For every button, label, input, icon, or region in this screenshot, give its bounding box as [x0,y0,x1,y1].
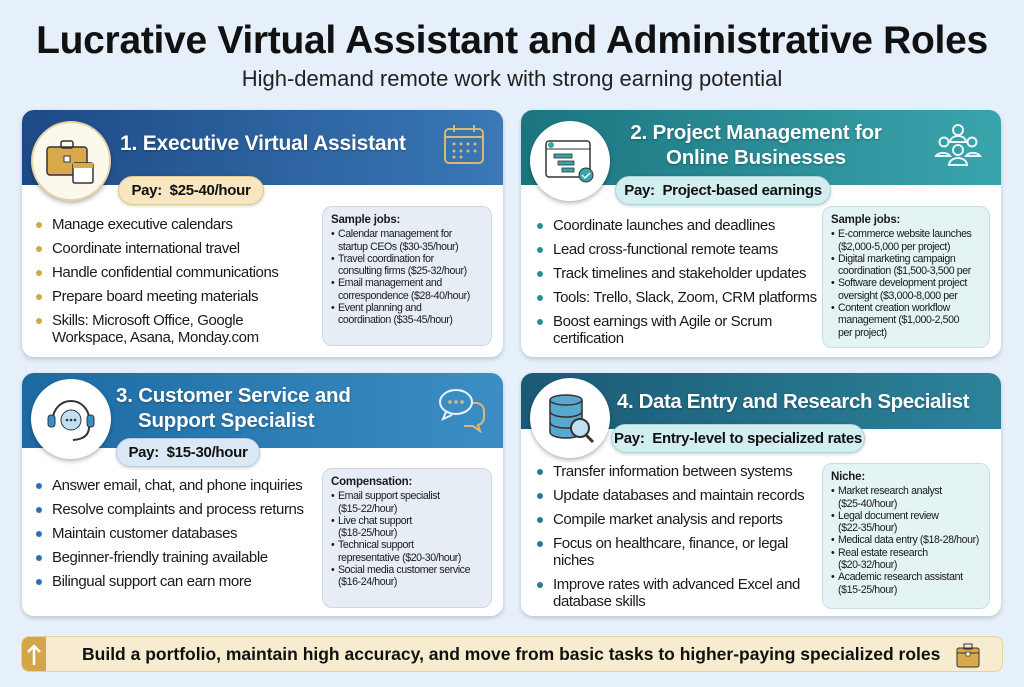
bullet list: Transfer information between systems [553,463,792,480]
compensation box [322,468,492,608]
footer text: Build a portfolio, maintain high accuracy, and move from basic tasks to higher-paying specialized roles [82,644,940,664]
bullet list: Skills: Microsoft Office, Google Workspace, Asana, Monday.com [52,312,259,346]
bullet list: Manage executive calendars [52,216,233,233]
bullet list: Handle confidential communications [52,264,279,281]
bullet list: Boost earnings with Agile or Scrum certification [553,313,772,347]
bullet list: Beginner-friendly training available [52,549,268,566]
compensation box: Technical support [338,539,414,551]
niche box: Market research analyst [838,485,942,497]
icon: up arrow [22,637,46,673]
icon: project board [530,121,610,201]
panel: data entry [521,373,1001,616]
bullet list [537,217,817,347]
bullet list: Maintain customer databases [52,525,237,542]
bullet list: Bilingual support can earn more [52,573,251,590]
sample jobs box: Event planning and [338,302,422,314]
bullet list: Update databases and maintain records [553,487,804,504]
compensation box: Email support specialist [338,490,440,502]
sample jobs box: Email management and [338,277,442,289]
pay pill: Pay: Project-based earnings [624,182,822,199]
bullet list [537,463,804,610]
sample jobs box: coordination ($35-45/hour) [338,314,452,326]
heading: 4. Data Entry and Research Specialist [617,390,969,413]
sample jobs box: Sample jobs: [331,214,400,226]
bullet list: Prepare board meeting materials [52,288,258,305]
pay pill: Pay: $15-30/hour [128,444,248,461]
niche box: Legal document review [838,510,939,522]
panel: executive virtual assistant [22,110,503,357]
heading: Online Businesses [666,146,846,169]
heading: 1. Executive Virtual Assistant [120,132,406,155]
sample jobs box: startup CEOs ($30-35/hour) [338,241,458,253]
icon: calendar [444,125,484,164]
subtitle: High-demand remote work with strong earning potential [242,66,782,91]
niche box: ($15-25/hour) [838,584,897,596]
heading [630,121,882,169]
sample jobs box: E-commerce website launches [838,228,971,240]
compensation box: Social media customer service [338,564,470,576]
niche box: ($25-40/hour) [838,498,897,510]
bullet list: Coordinate launches and deadlines [553,217,775,234]
bullet list: Tools: Trello, Slack, Zoom, CRM platforms [553,289,817,306]
niche box: ($20-32/hour) [838,559,897,571]
bullet list: Answer email, chat, and phone inquiries [52,477,302,494]
icon: chat bubbles [439,389,485,433]
sample jobs box: Digital marketing campaign [838,253,955,265]
icon: briefcase [31,121,111,201]
sample jobs box: Travel coordination for [338,253,434,265]
heading: Support Specialist [138,409,314,432]
sample jobs box [322,206,492,346]
panel: customer service [22,373,503,616]
bullet list: Focus on healthcare, finance, or legal niches [553,535,788,569]
bullet list: Track timelines and stakeholder updates [553,265,806,282]
compensation box: ($18-25/hour) [338,527,397,539]
bullet list [36,216,279,346]
niche box: Real estate research [838,547,928,559]
sample jobs box: Calendar management for [338,228,452,240]
pay pill [615,176,831,205]
sample jobs box: Software development project [838,277,967,289]
niche box [822,463,990,609]
panel: project management [521,110,1001,357]
bullet list: Resolve complaints and process returns [52,501,304,518]
sample jobs box: oversight ($3,000-8,000 per [838,290,957,302]
pay pill: Pay: Entry-level to specialized rates [614,430,862,447]
title: Lucrative Virtual Assistant and Administrative Roles [36,19,988,62]
compensation box: Live chat support [338,515,412,527]
sample jobs box [822,206,990,348]
compensation box: ($15-22/hour) [338,503,397,515]
bullet list: Coordinate international travel [52,240,240,257]
icon: headset [31,379,111,459]
compensation box: ($16-24/hour) [338,576,397,588]
sample jobs box: Content creation workflow [838,302,950,314]
niche box: Medical data entry ($18-28/hour) [838,534,979,546]
sample jobs box: Sample jobs: [831,214,900,226]
icon: database [530,378,610,458]
sample jobs box: per project) [838,327,887,339]
bullet list: Lead cross-functional remote teams [553,241,778,258]
heading: 3. Customer Service and [116,384,351,407]
bullet list: Compile market analysis and reports [553,511,782,528]
callout: footer tip [21,636,1003,672]
icon: briefcase small [956,644,980,668]
bullet list: Improve rates with advanced Excel and database skills [553,576,800,610]
sample jobs box: consulting firms ($25-32/hour) [338,265,467,277]
heading [116,384,351,433]
sample jobs box: ($2,000-5,000 per project) [838,241,950,253]
sample jobs box: coordination ($1,500-3,500 per [838,265,971,277]
compensation box: Compensation: [331,476,412,488]
pay pill [611,424,865,453]
niche box: Niche: [831,471,865,483]
heading: 2. Project Management for [630,121,882,144]
bullet list [36,477,304,590]
niche box: ($22-35/hour) [838,522,897,534]
compensation box: representative ($20-30/hour) [338,552,461,564]
icon: team [934,124,982,166]
sample jobs box: management ($1,000-2,500 [838,314,959,326]
niche box: Academic research assistant [838,571,963,583]
pay pill [118,176,264,205]
sample jobs box: correspondence ($28-40/hour) [338,290,470,302]
pay pill: Pay: $25-40/hour [131,182,251,199]
pay pill [116,438,260,467]
